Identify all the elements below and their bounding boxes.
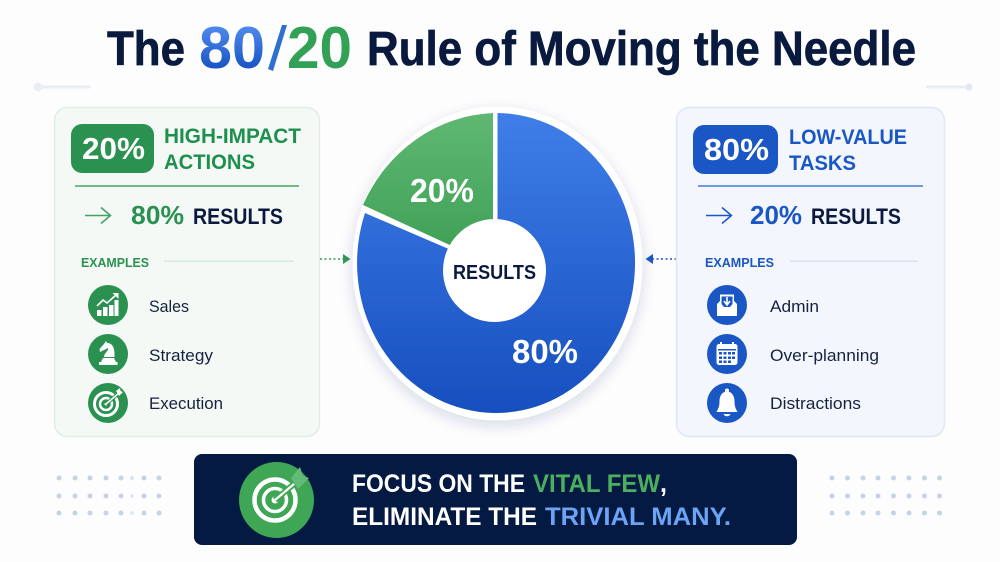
heading: low-value tasks: LOW-VALUE [789, 125, 907, 149]
examples label: EXAMPLES [81, 256, 149, 270]
title: The [107, 23, 185, 76]
pie white ring [352, 106, 642, 420]
label: admin: Admin [770, 297, 819, 316]
examples label: EXAMPLES [705, 256, 774, 270]
callout text: FOCUS ON THE [352, 470, 525, 498]
badge: 80% [693, 125, 778, 174]
icon: bell [707, 383, 747, 423]
center hub: results: RESULTS [453, 262, 536, 284]
heading: high-impact actions [164, 124, 301, 174]
label: sales: Sales [149, 297, 189, 316]
callout text: TRIVIAL MANY. [545, 503, 731, 531]
result: 20% results: RESULTS [811, 204, 901, 229]
icon: calendar [707, 334, 747, 374]
center hub: results [443, 219, 546, 322]
icon: sales chart [88, 285, 128, 325]
result: 80% results: 80% [131, 200, 184, 230]
heading: low-value tasks: TASKS [789, 151, 856, 175]
callout text [352, 470, 731, 531]
icon: chess knight [88, 334, 128, 374]
icon: target with dart [239, 462, 314, 538]
arrow [85, 208, 110, 224]
callout text: , [660, 470, 667, 498]
heading: high-impact actions: HIGH-IMPACT [164, 124, 301, 148]
slice label: 20%: 20% [410, 172, 474, 209]
label: execution: Execution [149, 394, 223, 413]
panel: low-value tasks [676, 108, 944, 436]
icon: inbox [707, 285, 747, 325]
title: 20 [287, 15, 352, 81]
label: over-planning: Over-planning [770, 346, 879, 365]
arrow [706, 208, 732, 224]
slice: 20% [363, 113, 493, 265]
badge: 80%: 80% [704, 132, 769, 167]
label: distractions: Distractions [770, 394, 861, 413]
callout text: VITAL FEW [533, 470, 660, 498]
result: 80% results [131, 200, 283, 230]
slice: 80% [357, 113, 635, 413]
badge: 20%: 20% [82, 131, 145, 166]
result: 80% results: RESULTS [193, 204, 283, 229]
heading: high-impact actions: ACTIONS [164, 150, 255, 174]
result: 20% results [750, 200, 901, 230]
badge: 20% [71, 124, 154, 173]
banner: focus callout [194, 454, 797, 545]
label: strategy: Strategy [149, 346, 214, 365]
slice label: 80%: 80% [512, 333, 578, 370]
title [107, 15, 916, 81]
heading: low-value tasks [789, 125, 907, 175]
callout text: ELIMINATE THE [352, 503, 537, 531]
pie chart [352, 106, 642, 420]
arrow: right panel to pie [646, 254, 676, 264]
arrow: left panel to pie [320, 254, 350, 264]
icon: target [88, 383, 128, 423]
title: Rule of Moving the Needle [367, 23, 916, 76]
panel: high-impact actions [54, 108, 320, 436]
result: 20% results: 20% [750, 200, 802, 230]
title: 80 [199, 15, 265, 81]
